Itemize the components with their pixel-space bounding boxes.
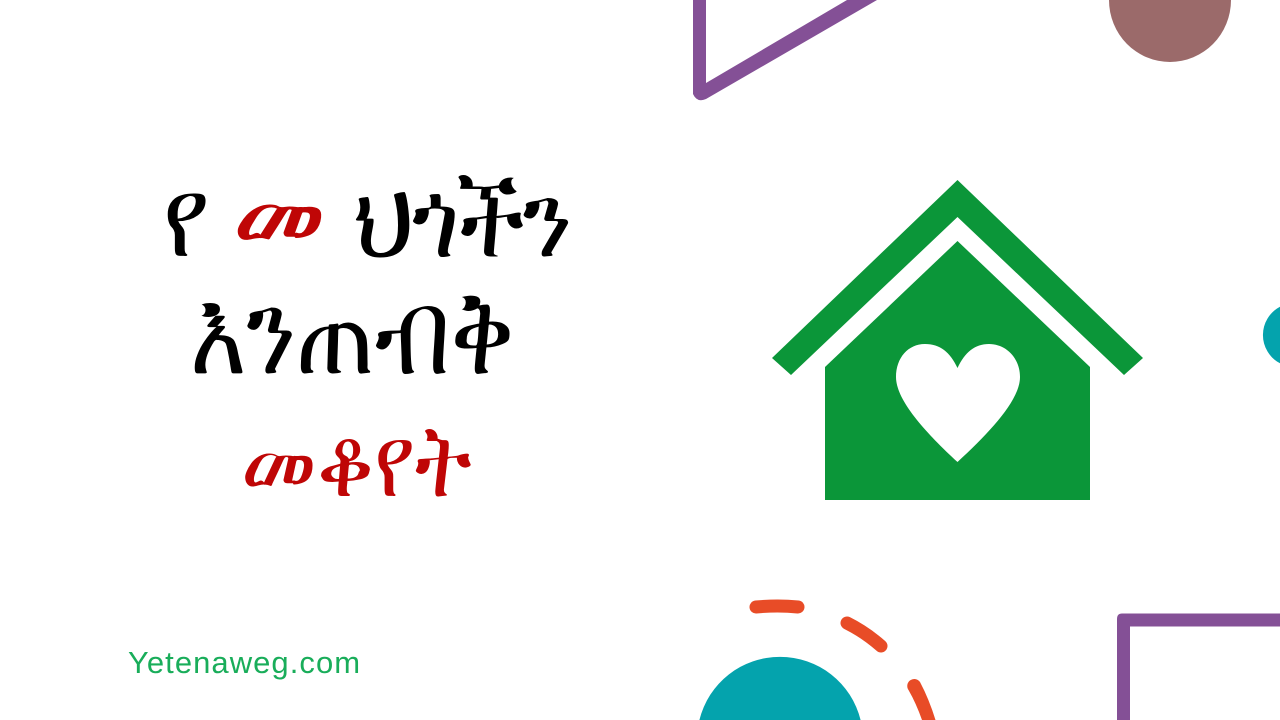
title line 1: red word me: መ [229, 156, 332, 272]
title line 2: እንጠብቅ [190, 266, 514, 400]
teal circle at right edge [1263, 307, 1280, 363]
teal semicircle [699, 657, 861, 720]
icon: house with heart [772, 180, 1143, 500]
icon: heart [896, 344, 1020, 462]
title line 1: word hegochin: ህጎችን [354, 162, 570, 280]
brown circle [1109, 0, 1231, 62]
orange dashed arc [756, 606, 936, 720]
title line 1: word ye: የ [163, 155, 209, 281]
purple triangle outline [693, 0, 877, 100]
purple square outline [1117, 614, 1280, 720]
title line 3: መቆየት [241, 405, 472, 519]
website label: Yetenaweg.com [128, 645, 361, 680]
